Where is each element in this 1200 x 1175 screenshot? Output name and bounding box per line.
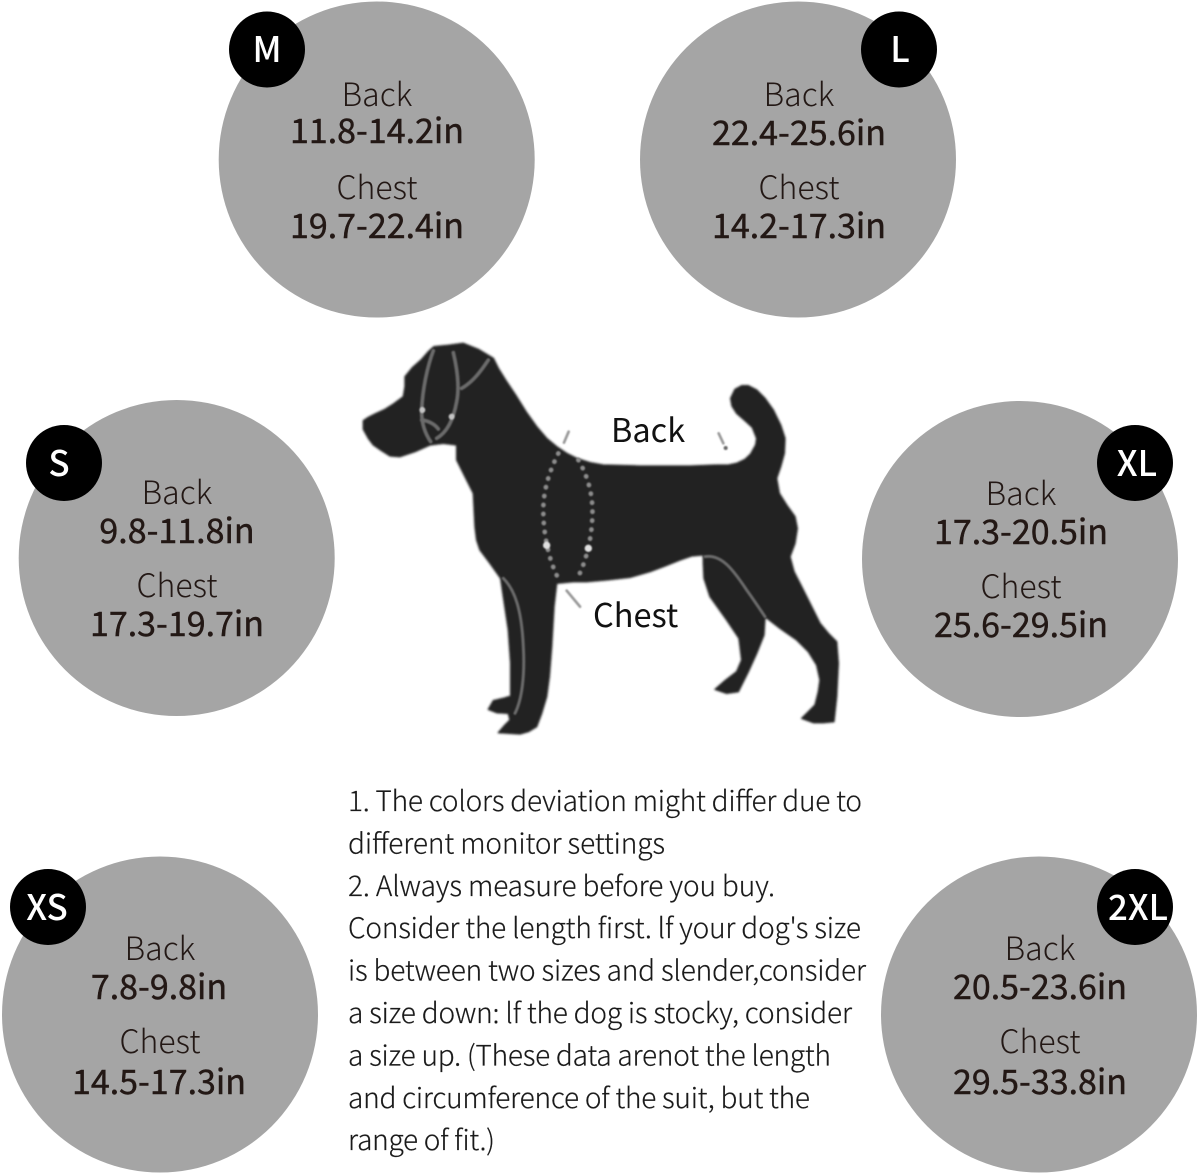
panel: size M [219, 2, 535, 318]
measurements: 2XL [953, 924, 1127, 1104]
measurements: XL [934, 469, 1108, 647]
badge: L: L [890, 22, 910, 73]
measurements: 2XL: Chest [999, 1017, 1081, 1063]
measurements: S: Chest [136, 561, 218, 607]
badge: XS [10, 869, 86, 945]
measurements: M: 11.8-14.2in [290, 104, 464, 153]
label: Chest: Chest [593, 590, 678, 637]
badge: XL: XL [1117, 436, 1157, 487]
measurements: L: 14.2-17.3in [712, 199, 886, 248]
text block: notes: different monitor settings [348, 822, 665, 862]
label: Back: Back [611, 405, 685, 452]
text block: notes: Consider the length first. lf your dog's size [348, 907, 861, 947]
badge: 2XL: 2XL [1108, 880, 1168, 931]
measurements: 2XL: 20.5-23.6in [953, 960, 1127, 1009]
measurements: S: Back [142, 468, 213, 514]
measurements: M: 19.7-22.4in [290, 199, 464, 248]
badge: S: S [48, 436, 70, 487]
text block: notes: 1. The colors deviation might differ due to [348, 780, 862, 820]
text block: notes: a size down: lf the dog is stocky, consider [348, 992, 853, 1032]
badge: L [861, 12, 937, 88]
badge: XS: XS [26, 880, 68, 931]
measurements: L: 22.4-25.6in [712, 106, 886, 155]
text block: notes: range of fit.) [348, 1119, 495, 1159]
badge: XL [1097, 425, 1173, 501]
panel: size XL [862, 401, 1178, 717]
measurements: XL: 17.3-20.5in [934, 505, 1108, 554]
measurements: L: Chest [758, 163, 840, 209]
badge: S [26, 425, 102, 501]
badge: 2XL [1097, 869, 1173, 945]
measurements: XL: 25.6-29.5in [934, 598, 1108, 647]
panel: size L [640, 2, 956, 318]
panel: size XS [2, 856, 318, 1172]
head harness lines [419, 351, 488, 442]
measurements: XL: Chest [980, 562, 1062, 608]
badge: M [229, 12, 305, 88]
leg highlight lines [503, 556, 765, 713]
panel: size S [19, 400, 335, 716]
measurements: 2XL: Back [1005, 924, 1076, 970]
text block: notes: a size up. (These data arenot the length [348, 1034, 831, 1074]
measurements: M: Chest [336, 163, 418, 209]
panel: size 2XL [881, 856, 1197, 1172]
text block: notes: is between two sizes and slender,consider [348, 950, 867, 990]
measurements: XL: Back [986, 469, 1057, 515]
badge: M: M [252, 22, 282, 73]
chest measurement loops [543, 453, 592, 579]
measurements: S [90, 468, 264, 646]
text block: notes [348, 780, 867, 1159]
measurements: L: Back [764, 70, 835, 116]
measurements: XS: 7.8-9.8in [91, 960, 227, 1009]
measurements: S: 17.3-19.7in [90, 597, 264, 646]
text block: notes: 2. Always measure before you buy. [348, 865, 775, 905]
measurements: M [290, 70, 464, 248]
text block: notes: and circumference of the suit, but the [348, 1077, 810, 1117]
illustration: dog silhouette with measurement guides [363, 343, 838, 734]
measurements: XS [72, 924, 246, 1104]
measurement arrows [564, 432, 728, 607]
measurements: XS: Back [125, 924, 196, 970]
measurements: S: 9.8-11.8in [99, 504, 255, 553]
measurements: L [712, 70, 886, 248]
measurements: XS: 14.5-17.3in [72, 1055, 246, 1104]
measurements: 2XL: 29.5-33.8in [953, 1055, 1127, 1104]
measurements: XS: Chest [119, 1017, 201, 1063]
dog body [363, 343, 838, 734]
measurements: M: Back [342, 70, 413, 116]
